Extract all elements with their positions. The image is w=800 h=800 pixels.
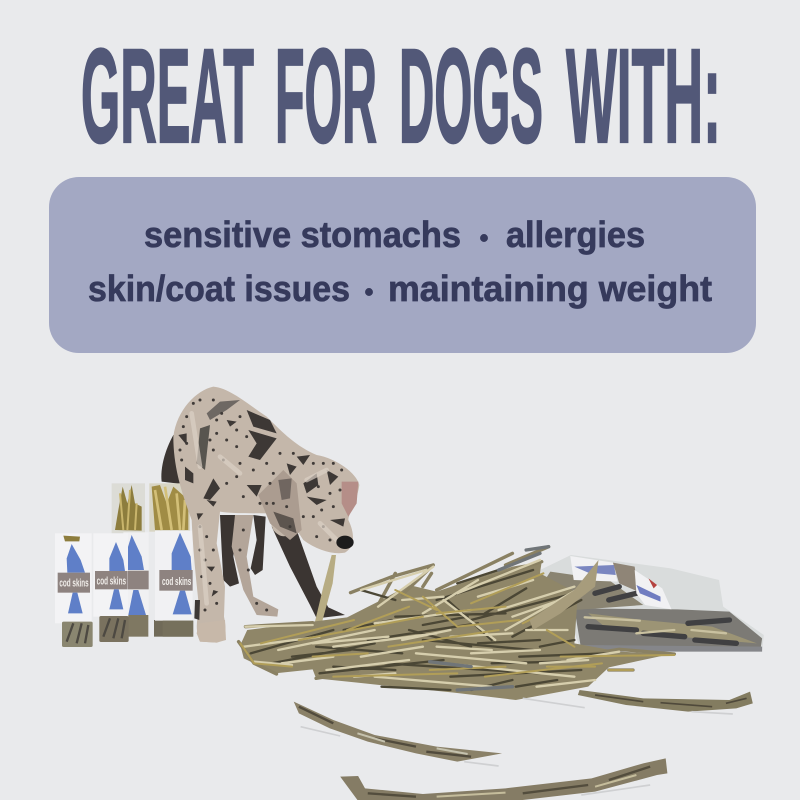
title: GREAT: [81, 22, 254, 171]
pile blue-grey strands: [430, 547, 549, 690]
title: DOGS: [399, 22, 543, 171]
bag of fish skins: [533, 555, 764, 652]
product tube right: [155, 531, 193, 637]
pile gold strands: [240, 573, 674, 677]
long strand across pile top: [530, 560, 599, 630]
hanging stick: [315, 555, 336, 623]
product tubes back row: [112, 483, 193, 637]
stick: middle: [294, 702, 502, 762]
benefits list: maintaining weight: [388, 268, 712, 309]
coat speckles: [180, 400, 342, 610]
bag label: [570, 556, 617, 582]
coat patches: [178, 400, 345, 620]
product tube left: [55, 533, 93, 647]
benefits list: sensitive stomachs: [144, 214, 461, 255]
near-side dark front leg: [272, 527, 345, 618]
nose: [336, 536, 354, 549]
panel: benefits: [49, 177, 756, 353]
stick: right: [578, 690, 753, 712]
dog: [173, 387, 359, 643]
benefits list: [88, 214, 712, 309]
product tube middle: [93, 533, 129, 642]
pile base: [240, 562, 671, 700]
product tube left: cod skins: [59, 578, 89, 590]
ear right: [342, 482, 358, 517]
title: FOR: [275, 22, 377, 171]
soft shadows: [301, 698, 733, 795]
pile dark strands: [251, 570, 609, 690]
benefits list: allergies: [506, 214, 645, 255]
pile light strands: [244, 560, 619, 687]
dark far legs: [161, 435, 266, 587]
pile outer strands: [239, 547, 674, 678]
body and head: [173, 387, 359, 643]
fish skins pile and bag: [239, 547, 764, 800]
product tube middle: cod skins: [97, 575, 126, 587]
ear: [258, 470, 302, 540]
product tube right: cod skins: [162, 576, 191, 588]
coat highlights: [192, 413, 340, 603]
benefits list: skin/coat issues: [88, 268, 350, 309]
paw: [197, 620, 226, 643]
hind leg: [232, 515, 278, 617]
product tubes and dog: [55, 387, 359, 647]
stick: bottom: [340, 758, 667, 800]
